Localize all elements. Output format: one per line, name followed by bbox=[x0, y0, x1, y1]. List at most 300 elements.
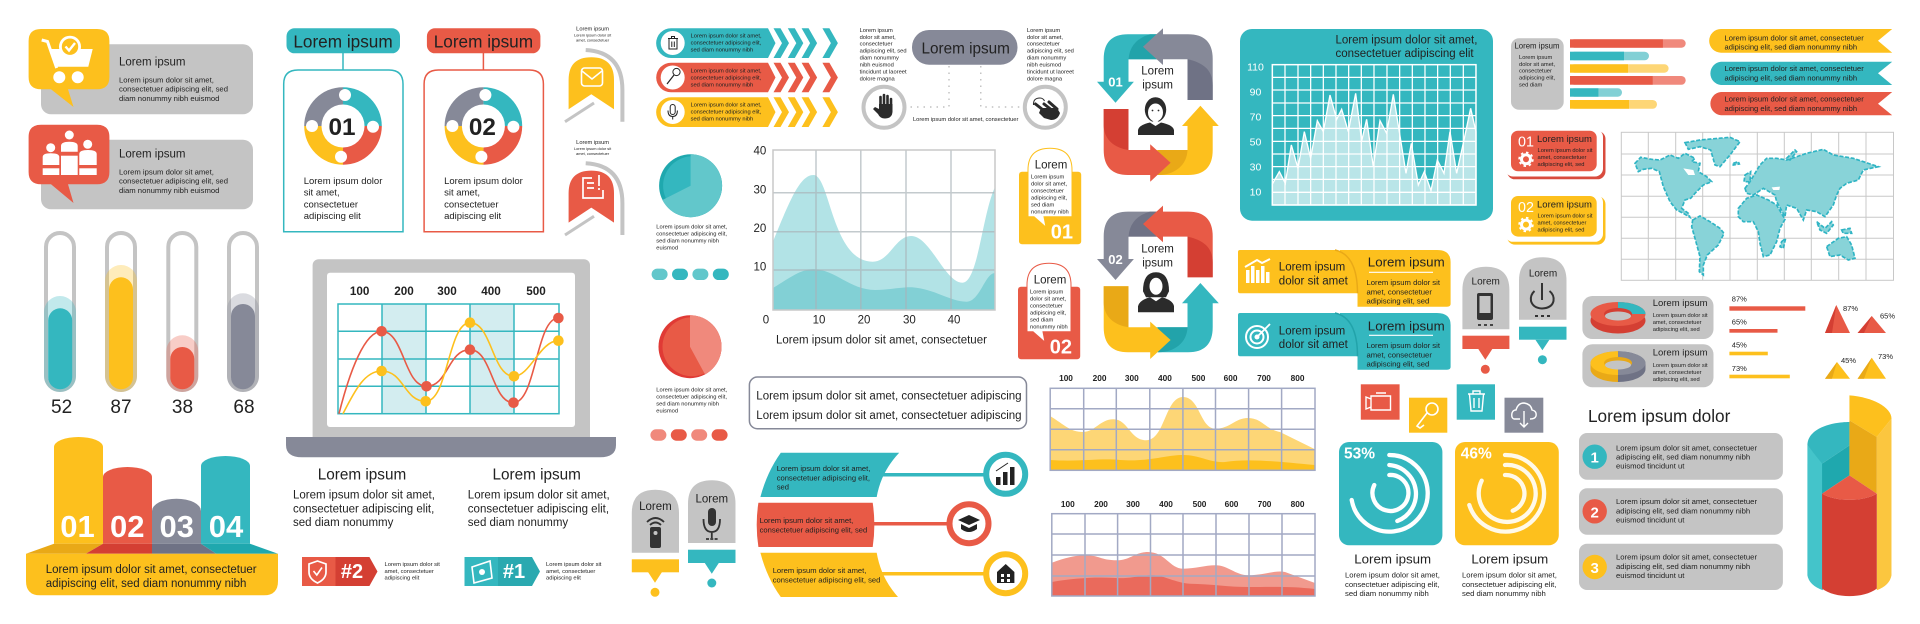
panel: curved row red: consectetuer adipiscing elit, sed bbox=[760, 525, 867, 534]
panel: donut 01: Lorem ipsum bbox=[293, 32, 393, 52]
panel: yellow label with chart icon: amet, consectetuer bbox=[1366, 287, 1432, 296]
chart: line chart on screen: 200 bbox=[394, 285, 414, 298]
banner: teal ribbon: adipiscing elit, sed diam nonummy nibh bbox=[1724, 73, 1857, 82]
text: donut 01: Lorem ipsum dolor bbox=[304, 176, 382, 187]
text: shopping callout: diam nonummy nibh euismod bbox=[119, 94, 219, 103]
panel: numbered card 01: amet, consectetuer bbox=[1538, 155, 1586, 161]
badge: rank 1: #1 bbox=[503, 561, 525, 583]
chart: line chart on screen bbox=[338, 285, 564, 414]
panel: teal label with target icon: adipiscing elit, sed bbox=[1366, 360, 1429, 369]
panel: gesture diagram: Lorem ipsum dolor sit amet, consectetuer bbox=[913, 117, 1019, 123]
banner: yellow ribbon bbox=[1709, 29, 1892, 53]
panel: teal radial: consectetuer adipiscing elit, bbox=[1345, 580, 1439, 589]
chart: percent bars: 73% bbox=[1732, 364, 1747, 373]
panel: numbered card 01: Lorem ipsum bbox=[1537, 134, 1592, 145]
chart: percent triangles: 73% bbox=[1878, 352, 1893, 361]
panel: yellow label with chart icon: adipiscing elit, sed bbox=[1366, 296, 1429, 305]
panel: teal label with target icon: dolor sit amet bbox=[1279, 339, 1349, 351]
chart: line chart on screen: 300 bbox=[437, 285, 457, 298]
text: gesture right bbox=[1027, 28, 1074, 82]
panel: note tag 02 bbox=[1018, 263, 1080, 359]
arrow: gray down bbox=[1097, 212, 1160, 280]
panel: teal spike chart: 110 bbox=[1247, 62, 1264, 74]
chart: red area chart: 200 bbox=[1094, 499, 1108, 509]
chart: yellow area chart: 800 bbox=[1291, 373, 1305, 383]
text: donut 01: sit amet, bbox=[304, 188, 340, 199]
chart: red pie: consectetuer adipiscing elit, bbox=[656, 395, 727, 401]
panel: curved row teal: consectetuer adipiscing elit, bbox=[777, 473, 870, 482]
panel: phone tag: Lorem bbox=[1472, 276, 1500, 287]
text: shopping callout bbox=[119, 57, 228, 103]
text: donut 02: sit amet, bbox=[444, 188, 480, 199]
banner: yellow ribbon: adipiscing elit, sed diam nonummy nibh bbox=[1724, 43, 1857, 52]
chart: line chart on screen: 500 bbox=[526, 285, 546, 298]
chart: percent triangles: 65% bbox=[1880, 312, 1895, 321]
panel: teal radial bbox=[1339, 442, 1442, 598]
chart: world map bbox=[1621, 132, 1894, 280]
arrow: red left bbox=[1143, 206, 1213, 277]
panel: ring 2: Lorem ipsum bbox=[1653, 348, 1708, 359]
icon: red bookmark document: Lorem ipsum bbox=[576, 140, 609, 146]
panel: teal radial: Lorem ipsum dolor sit amet, bbox=[1345, 571, 1440, 580]
chart: percent bars bbox=[1729, 295, 1805, 378]
chart: 3d ring red teal bbox=[1590, 302, 1646, 334]
chart: red area chart: 800 bbox=[1291, 499, 1305, 509]
panel: stacked bars bbox=[1511, 38, 1686, 110]
text: laptop captions bbox=[293, 466, 610, 529]
badge: rank 2: amet, consectetuer bbox=[384, 569, 434, 575]
chart: red area chart: 500 bbox=[1193, 499, 1207, 509]
map: continents bbox=[1635, 137, 1878, 275]
panel: numbered card 02: Lorem ipsum bbox=[1537, 199, 1592, 210]
panel: teal spike chart: 70 bbox=[1250, 112, 1261, 124]
text: gesture right: Lorem ipsum bbox=[1027, 28, 1060, 34]
panel: ring 2: amet, consectetuer bbox=[1653, 370, 1702, 376]
chart: 3d ring yellow gray bbox=[1590, 351, 1646, 382]
icon: yellow bookmark mail: amet, consectetuer bbox=[576, 38, 610, 43]
panel: remote control tag: Lorem bbox=[639, 501, 672, 513]
panel: curved row teal: sed bbox=[777, 483, 789, 492]
panel: note tag 01: 01 bbox=[1051, 222, 1073, 244]
chart: numbered columns on base: 02 bbox=[110, 509, 145, 544]
icon: gear bbox=[1519, 152, 1533, 166]
panel: chevron row red: sed diam nonummy nibh bbox=[691, 82, 753, 88]
panel: teal spike chart: 10 bbox=[1250, 186, 1261, 198]
panel: note tag 02: adipiscing elit, bbox=[1030, 310, 1067, 316]
text: donut 01: consectetuer bbox=[304, 199, 358, 210]
panel: yellow radial: sed diam nonummy nibh bbox=[1462, 589, 1546, 598]
chart: main area chart: 10 bbox=[813, 315, 825, 327]
panel: ring 2: adipiscing elit, sed bbox=[1653, 377, 1700, 383]
icon tile: camera bbox=[1361, 384, 1400, 420]
heading: list title: Lorem ipsum dolor bbox=[1588, 406, 1731, 426]
panel: numbered card 01: adipiscing elit, sed bbox=[1538, 162, 1584, 168]
text: laptop captions: consectetuer adipiscing elit, bbox=[468, 503, 609, 515]
panel: yellow radial: 46% bbox=[1461, 446, 1492, 463]
chart: teal pie bbox=[652, 154, 729, 280]
panel: chevron row teal bbox=[656, 28, 838, 58]
text: donut 02 bbox=[444, 176, 523, 222]
panel: outlined text box: Lorem ipsum dolor sit amet, consectetuer adipiscing bbox=[756, 410, 1022, 422]
icon: yellow bookmark mail bbox=[565, 27, 622, 122]
gauge 38 bbox=[166, 233, 198, 418]
heading: gesture pill bbox=[912, 30, 1018, 65]
panel: yellow label with chart icon: dolor sit amet bbox=[1279, 275, 1349, 287]
panel: note tag 01: adipiscing elit, bbox=[1031, 195, 1068, 201]
chart: teal pie: consectetuer adipiscing elit, bbox=[656, 232, 727, 238]
chart: yellow area chart: 300 bbox=[1125, 373, 1139, 383]
icon: shopping cart bbox=[42, 36, 93, 83]
icon tile: key bbox=[1409, 398, 1447, 433]
gauge 68: 68 bbox=[233, 397, 255, 418]
text: gesture right: diam nonummy bbox=[1027, 56, 1066, 62]
panel: outlined text box bbox=[749, 377, 1026, 429]
panel: teal radial: Lorem ipsum bbox=[1354, 552, 1431, 567]
arrow: teal up bbox=[1155, 283, 1219, 352]
panel: shopping callout bbox=[29, 29, 253, 114]
icon: red bookmark document: amet, consectetuer bbox=[576, 151, 610, 156]
panel: donut 01 bbox=[284, 28, 403, 232]
badge: rank 2: Lorem ipsum dolor sit bbox=[384, 562, 440, 568]
panel: chevron row yellow: Lorem ipsum dolor sit amet, bbox=[691, 103, 762, 109]
panel: teal label with target icon: Lorem ipsum bbox=[1368, 318, 1445, 333]
badge: rank 1 bbox=[464, 557, 602, 586]
chart: main area chart: 10 bbox=[754, 262, 766, 274]
panel: curved row yellow: Lorem ipsum dolor sit amet, bbox=[773, 566, 866, 575]
banner: red ribbon: Lorem ipsum dolor sit amet, consectetuer bbox=[1724, 95, 1864, 104]
panel: laptop chart bbox=[286, 259, 616, 457]
heading: gesture pill: Lorem ipsum bbox=[921, 40, 1010, 57]
banner: teal ribbon: Lorem ipsum dolor sit amet, consectetuer bbox=[1724, 64, 1864, 73]
panel: curved row red: Lorem ipsum dolor sit amet, bbox=[760, 516, 853, 525]
text: people callout: diam nonummy nibh euismod bbox=[119, 186, 219, 195]
chart: yellow area chart: 100 bbox=[1059, 373, 1073, 383]
text: gesture right: nibh euismod bbox=[1027, 62, 1061, 68]
chart: numbered columns on base: adipiscing elit, sed diam nonummy nibh bbox=[46, 578, 246, 590]
list item 3: 3 bbox=[1591, 560, 1599, 577]
icon tile: trash bbox=[1457, 384, 1495, 420]
chart: percent bars: 87% bbox=[1732, 295, 1747, 304]
chart: test tube gauges bbox=[44, 233, 259, 418]
panel: stacked bars: adipiscing elit, bbox=[1519, 76, 1556, 82]
panel: chevron row yellow: consectetuer adipiscing elit, bbox=[691, 110, 762, 116]
panel: donut 02 bbox=[424, 28, 543, 232]
text: shopping callout: consectetuer adipiscing elit, sed bbox=[119, 85, 228, 94]
chart: red pie: Lorem ipsum dolor sit amet, bbox=[656, 388, 728, 394]
panel: yellow radial: Lorem ipsum bbox=[1471, 552, 1548, 567]
gauge 52: 52 bbox=[51, 397, 72, 418]
text: people callout: Lorem ipsum dolor sit amet, bbox=[119, 167, 214, 176]
arrow: red right bbox=[1104, 109, 1171, 182]
panel: stacked bars: Lorem ipsum bbox=[1519, 55, 1552, 61]
text: shopping callout: Lorem ipsum dolor sit amet, bbox=[119, 75, 214, 84]
text: gesture left: consectetuer bbox=[860, 42, 893, 48]
text: laptop captions: Lorem ipsum dolor sit amet, bbox=[293, 490, 435, 502]
list item 2 bbox=[1579, 488, 1783, 535]
text: laptop captions: Lorem ipsum bbox=[318, 466, 406, 483]
chart: donut 01: 01 bbox=[328, 114, 356, 141]
gauge 87: 87 bbox=[110, 397, 132, 418]
icon: touch hand bbox=[1025, 87, 1066, 128]
icon: target bbox=[1246, 324, 1270, 348]
panel: yellow label with chart icon: Lorem ipsum bbox=[1368, 255, 1445, 270]
text: gesture left: dolore magna bbox=[860, 76, 896, 82]
chart: yellow area chart: 200 bbox=[1093, 373, 1107, 383]
chart: red pie bbox=[650, 315, 728, 441]
legend: red dots bbox=[650, 429, 728, 441]
banner: red ribbon: adipiscing elit, sed diam nonummy nibh bbox=[1724, 104, 1857, 113]
chart: yellow area chart bbox=[1050, 373, 1315, 470]
panel: curved row teal: Lorem ipsum dolor sit amet, bbox=[777, 464, 870, 473]
chart: donut 02 bbox=[445, 87, 522, 165]
banner: red ribbon bbox=[1710, 92, 1892, 115]
gauge 38: 38 bbox=[172, 397, 193, 418]
text: gesture left: tincidunt ut laoreet bbox=[860, 69, 907, 75]
text: people callout: consectetuer adipiscing elit, sed bbox=[119, 177, 228, 186]
chart: yellow area chart: 400 bbox=[1158, 373, 1172, 383]
list item 1 bbox=[1579, 433, 1783, 480]
panel: numbered card 01: 01 bbox=[1518, 135, 1534, 151]
icon: house bbox=[997, 564, 1014, 583]
chart: main area chart: 0 bbox=[763, 315, 769, 327]
panel: stacked bars: dolor sit amet, bbox=[1519, 62, 1556, 68]
chart: percent triangles: 45% bbox=[1841, 356, 1856, 365]
panel: people callout bbox=[29, 125, 253, 209]
chart: red area chart: 700 bbox=[1258, 499, 1272, 509]
chart: donut 02: 02 bbox=[469, 114, 496, 141]
panel: chevron row teal: sed diam nonummy nibh bbox=[691, 48, 753, 54]
panel: yellow label with chart icon bbox=[1238, 250, 1451, 307]
list item 1: Lorem ipsum dolor sit amet, consectetuer bbox=[1616, 443, 1757, 452]
diagram: arrow loop 02 bbox=[1097, 206, 1219, 359]
text: gesture left: adipiscing elit, sed bbox=[860, 49, 907, 55]
chart: main area chart: 30 bbox=[903, 315, 916, 327]
chart: main area chart: Lorem ipsum dolor sit amet, consectetuer bbox=[776, 335, 987, 347]
chart: main area chart: 30 bbox=[754, 184, 766, 196]
list item 3: Lorem ipsum dolor sit amet, consectetuer bbox=[1616, 553, 1757, 562]
text: people callout bbox=[119, 149, 228, 195]
list item 2: 2 bbox=[1591, 504, 1599, 521]
text: donut 02: adipiscing elit bbox=[444, 211, 501, 222]
list item 2: Lorem ipsum dolor sit amet, consectetuer bbox=[1616, 497, 1757, 506]
arrow: yellow right bbox=[1104, 286, 1171, 359]
icon: yellow bookmark mail: Lorem ipsum bbox=[576, 27, 609, 33]
list item 3: adipiscing elit, sed diam nonummy nibh bbox=[1616, 562, 1750, 571]
panel: note tag 02: Lorem bbox=[1034, 274, 1066, 286]
icon tile: cloud download bbox=[1504, 398, 1543, 433]
panel: numbered card 02: adipiscing elit, sed bbox=[1538, 227, 1584, 233]
text: donut 01: adipiscing elit bbox=[304, 211, 361, 222]
gauge 68 bbox=[227, 233, 259, 418]
panel: teal label with target icon: amet, consectetuer bbox=[1366, 351, 1432, 360]
panel: note tag 01 bbox=[1019, 148, 1081, 244]
panel: ring 2: Lorem ipsum dolor sit bbox=[1653, 363, 1708, 369]
badge: rank 1: Lorem ipsum dolor sit bbox=[546, 562, 602, 568]
diagram: arrow loop 02: Lorem bbox=[1141, 243, 1174, 255]
badge: rank 2 bbox=[302, 557, 440, 586]
text: gesture right: consectetuer bbox=[1027, 42, 1060, 48]
badge: rank 2: #2 bbox=[341, 561, 363, 583]
panel: microphone tag: Lorem bbox=[695, 493, 728, 505]
panel: chevron row red: Lorem ipsum dolor sit amet, bbox=[691, 68, 762, 74]
panel: gesture diagram bbox=[860, 28, 1074, 128]
icon: remote wifi bbox=[647, 518, 664, 548]
icon: red bookmark document bbox=[565, 140, 622, 235]
text: laptop captions: sed diam nonummy bbox=[293, 517, 394, 529]
text: gesture left: nibh euismod bbox=[860, 62, 894, 68]
text: laptop captions: Lorem ipsum bbox=[492, 466, 581, 483]
text: laptop captions: consectetuer adipiscing elit, bbox=[293, 503, 434, 515]
diagram: arrow loop 02: 02 bbox=[1108, 252, 1123, 267]
panel: yellow radial bbox=[1455, 442, 1559, 598]
text: shopping callout: Lorem ipsum bbox=[119, 57, 185, 69]
panel: note tag 01: Lorem bbox=[1035, 159, 1067, 171]
panel: note tag 02: sed diam bbox=[1030, 317, 1054, 323]
gauge 87 bbox=[105, 233, 137, 418]
chart: spikes bbox=[1272, 65, 1476, 205]
arrow: teal down bbox=[1097, 34, 1160, 103]
panel: teal radial: 53% bbox=[1344, 446, 1375, 463]
panel: curved row red bbox=[757, 503, 988, 547]
panel: power tag bbox=[1519, 257, 1566, 364]
icon: yellow bookmark mail: Lorem ipsum dolor sit bbox=[574, 33, 612, 38]
panel: note tag 02: dolor sit amet, bbox=[1030, 296, 1067, 302]
icon: white bar chart bbox=[1245, 259, 1270, 283]
text: laptop captions: Lorem ipsum dolor sit amet, bbox=[468, 490, 610, 502]
chart: red area chart: 400 bbox=[1159, 499, 1173, 509]
legend: teal dots bbox=[652, 269, 729, 280]
panel: note tag 01: consectetuer bbox=[1031, 188, 1064, 194]
panel: ring 1: Lorem ipsum bbox=[1653, 298, 1708, 309]
chart: main area chart: 20 bbox=[858, 315, 870, 327]
diagram: arrow loop 01: 01 bbox=[1108, 75, 1123, 90]
panel: numbered card 02: amet, consectetuer bbox=[1538, 220, 1586, 226]
list item 1: adipiscing elit, sed diam nonummy nibh bbox=[1616, 453, 1750, 462]
diagram: arrow loop 01 bbox=[1097, 28, 1219, 182]
arrow: yellow up bbox=[1155, 106, 1219, 175]
chart: percent bars: 65% bbox=[1732, 318, 1747, 327]
text: gesture left: diam nonummy bbox=[860, 56, 899, 62]
chart: donut 01 bbox=[304, 87, 382, 165]
badge: rank 1: adipiscing elit bbox=[546, 576, 581, 582]
panel: chevron row teal: Lorem ipsum dolor sit amet, bbox=[691, 34, 762, 40]
list item 1: euismod tincidunt ut bbox=[1616, 462, 1685, 471]
panel: stacked bars: consectetuer bbox=[1519, 69, 1552, 75]
icon: power bbox=[1531, 283, 1554, 316]
chart: yellow area chart: 500 bbox=[1191, 373, 1206, 383]
text: people callout: Lorem ipsum bbox=[119, 149, 185, 161]
list item 2: adipiscing elit, sed diam nonummy nibh bbox=[1616, 506, 1750, 515]
icon: microphone bbox=[704, 508, 720, 539]
chart: red area chart: 100 bbox=[1061, 499, 1075, 509]
chart: yellow area chart: 600 bbox=[1224, 373, 1238, 383]
panel: ring 1: amet, consectetuer bbox=[1653, 320, 1702, 326]
panel: note tag 02: nonummy nibh bbox=[1030, 324, 1068, 330]
icon: stop hand bbox=[864, 87, 904, 128]
panel: remote control tag bbox=[632, 490, 679, 597]
panel: ring 2 bbox=[1582, 344, 1714, 387]
chart: 3d cylinder bbox=[1807, 395, 1891, 596]
panel: yellow radial: Lorem ipsum dolor sit amet, bbox=[1462, 571, 1557, 580]
panel: curved row teal bbox=[760, 453, 1025, 497]
chart: line chart on screen: 400 bbox=[481, 285, 501, 298]
text: laptop captions: sed diam nonummy bbox=[468, 517, 568, 529]
chart: concentric arcs yellow bbox=[1469, 455, 1544, 532]
panel: teal spike chart bbox=[1240, 29, 1493, 221]
panel: chevron row yellow bbox=[656, 97, 838, 127]
icon: red bookmark document: Lorem ipsum dolor sit bbox=[574, 146, 612, 151]
icon: rising bars bbox=[996, 463, 1014, 485]
text: gesture right: adipiscing elit, sed bbox=[1027, 49, 1074, 55]
panel: phone tag bbox=[1462, 267, 1509, 374]
panel: note tag 01: sed diam bbox=[1031, 202, 1055, 208]
list item 3 bbox=[1579, 544, 1783, 590]
chart: yellow area chart: 700 bbox=[1257, 373, 1271, 383]
chart: numbered columns on base bbox=[26, 437, 278, 595]
panel: note tag 02: Lorem ipsum bbox=[1030, 289, 1063, 295]
panel: power tag: Lorem bbox=[1529, 269, 1557, 280]
icon: phone bbox=[1477, 293, 1493, 325]
text: gesture left bbox=[860, 28, 907, 82]
arrow: gray left bbox=[1143, 28, 1213, 100]
panel: note tag 02: 02 bbox=[1050, 337, 1072, 359]
chart: line chart on screen: 100 bbox=[350, 285, 370, 298]
panel: curved row yellow: consectetuer adipiscing elit, sed bbox=[773, 575, 880, 584]
chart: numbered columns on base: 03 bbox=[159, 509, 194, 544]
icon: people bbox=[43, 130, 97, 175]
list item 2: euismod tincidunt ut bbox=[1616, 515, 1685, 524]
panel: numbered card 01 bbox=[1505, 129, 1606, 179]
panel: numbered card 01: Lorem ipsum dolor sit bbox=[1538, 148, 1593, 154]
chart: concentric arcs teal bbox=[1352, 455, 1428, 532]
banner: yellow ribbon: Lorem ipsum dolor sit amet, consectetuer bbox=[1724, 33, 1864, 42]
text: donut 01 bbox=[304, 176, 382, 222]
panel: note tag 01: dolor sit amet, bbox=[1031, 181, 1068, 187]
chart: numbered columns on base: 04 bbox=[209, 509, 244, 544]
icon: graduation cap bbox=[958, 515, 980, 532]
panel: chevron row red bbox=[656, 63, 838, 92]
panel: outlined text box: Lorem ipsum dolor sit amet, consectetuer adipiscing bbox=[756, 391, 1022, 403]
panel: numbered card 02 bbox=[1505, 194, 1606, 245]
panel: curved row yellow bbox=[760, 553, 1025, 597]
panel: yellow radial: consectetuer adipiscing elit, bbox=[1462, 580, 1556, 589]
panel: teal spike chart: 50 bbox=[1250, 137, 1261, 149]
chart: main area chart: 40 bbox=[948, 315, 960, 327]
badge: rank 2: adipiscing elit bbox=[384, 576, 420, 582]
panel: donut 02: Lorem ipsum bbox=[434, 32, 533, 52]
icon: gear bbox=[1519, 218, 1533, 231]
chart: horizontal bars bbox=[1570, 39, 1686, 109]
chart: teal pie: sed diam nonummy nibh bbox=[656, 239, 719, 245]
panel: ring 1: Lorem ipsum dolor sit bbox=[1653, 313, 1708, 319]
panel: teal spike chart: consectetuer adipiscing elit bbox=[1336, 48, 1474, 60]
panel: chevron row teal: consectetuer adipiscing elit, bbox=[691, 41, 762, 47]
text: gesture right: tincidunt ut laoreet bbox=[1027, 69, 1074, 75]
panel: ring 1: adipiscing elit, sed bbox=[1653, 327, 1700, 333]
gauge 52 bbox=[44, 233, 76, 418]
chart: percent bars: 45% bbox=[1732, 341, 1747, 350]
panel: note tag 01: Lorem ipsum bbox=[1031, 174, 1064, 180]
icon: businesswoman bbox=[1138, 272, 1174, 312]
text: gesture right: dolore magna bbox=[1027, 76, 1063, 82]
list item 3: euismod tincidunt ut bbox=[1616, 571, 1685, 580]
chart: red area chart: 300 bbox=[1126, 499, 1140, 509]
panel: teal spike chart: 90 bbox=[1250, 87, 1261, 99]
panel: ring 1 bbox=[1582, 296, 1714, 339]
text: gesture left: Lorem ipsum bbox=[860, 28, 893, 34]
chart: numbered columns on base: Lorem ipsum dolor sit amet, consectetuer bbox=[46, 564, 257, 576]
panel: numbered card 02: 02 bbox=[1518, 200, 1534, 216]
